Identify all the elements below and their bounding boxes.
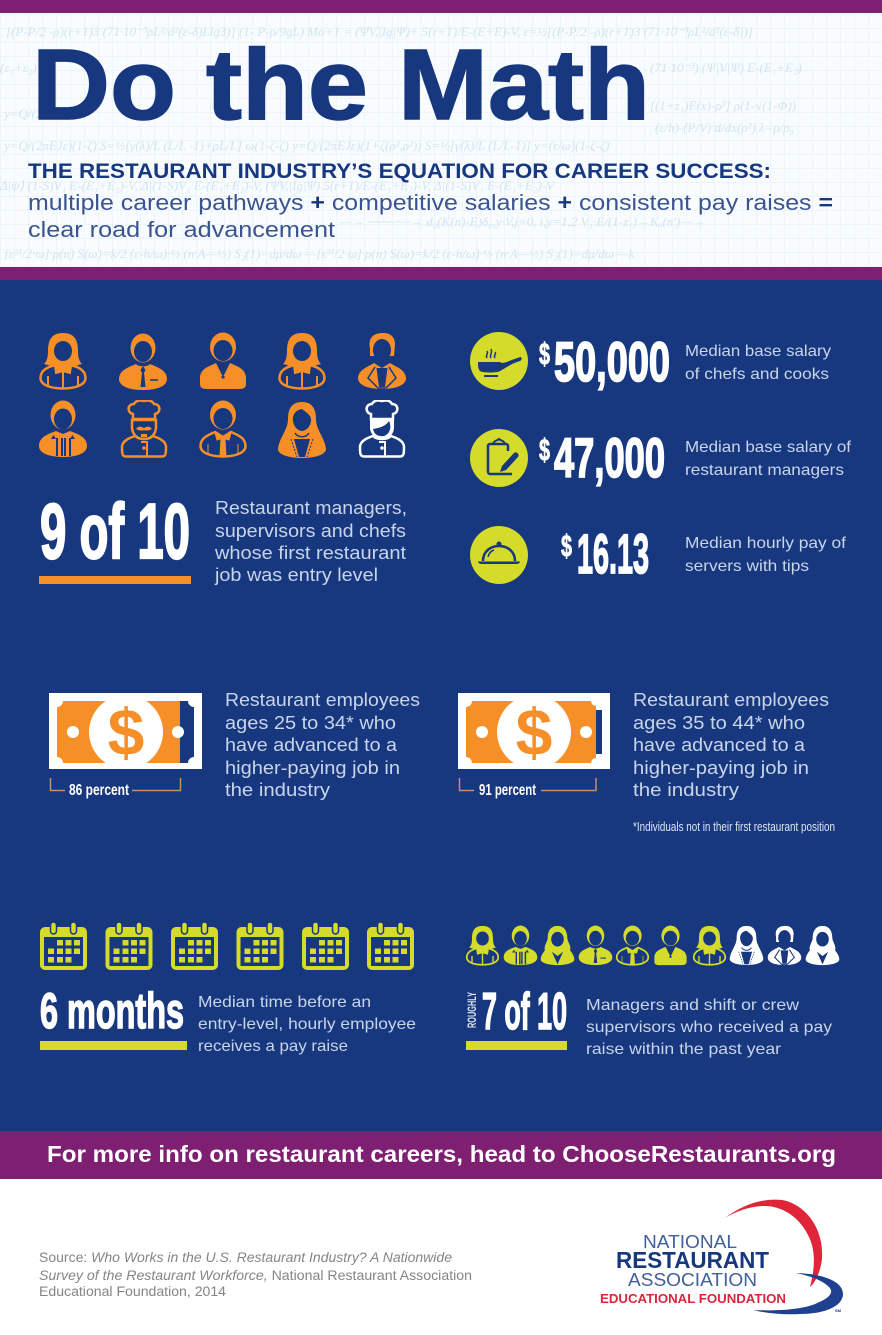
logo: National Restaurant Association Educational Foundation: ASSOCIATION: [628, 1270, 757, 1290]
statistic: $47,000: [539, 426, 665, 489]
text: 9 of 10 description: Restaurant managers,: [215, 498, 407, 518]
text: 7 of 10 description: supervisors who received a pay: [586, 1019, 832, 1036]
logo: National Restaurant Association Educational Foundation: RESTAURANT: [616, 1247, 769, 1273]
statistic: $16.13: 16.13: [577, 522, 649, 585]
text: 6 months description: receives a pay raise: [198, 1038, 348, 1055]
source text: [39, 1250, 472, 1299]
source text: Survey of the Restaurant Workforce, National Restaurant Association: [39, 1268, 472, 1283]
header background: y=Q/(2πEJε)(1-ζ) S=½[γ(λ)/L (L/L -1)+ρL/L] ω(1-ζ-ζ) y=Q/(2πEJε)(1+ζ(ρ²,ρ²)) S=½[γ(λ)/L (L/L-1)] y=(ε/ω)(1-ζ-ζ): [2, 138, 609, 153]
statistic: $50,000: $: [539, 336, 550, 371]
icon: frying pan: [470, 332, 528, 390]
call to action band: For more info on restaurant careers, head to ChooseRestaurants.org: [47, 1141, 836, 1167]
text: restaurant managers: Median base salary of: [685, 439, 852, 456]
text: 9 of 10 description: [214, 498, 407, 585]
bracket label: 91 percent: [460, 778, 596, 799]
text: ages 25 to 34: [225, 690, 420, 800]
text: ages 25 to 34: ages 25 to 34* who: [225, 713, 396, 733]
text: 9 of 10 description: job was entry level: [214, 565, 378, 585]
statistic: $16.13: $: [561, 528, 572, 563]
text: ages 35 to 44: higher-paying job in: [633, 758, 809, 778]
text: 7 of 10 description: raise within the past year: [586, 1041, 782, 1058]
header background: —→ ~~~~~~→ d₀(K(n)-E)δ₀,y·V,j=0, i,y=1,2 V₁·E/(1-z₁)→Kₐ(n')—→: [339, 214, 705, 229]
text: restaurant managers: restaurant managers: [685, 462, 844, 479]
icon: dollar bill 91 percent: [458, 693, 610, 769]
statistic: 9 of 10: 9 of 10: [40, 487, 190, 575]
text: 9 of 10 description: whose first restaurant: [214, 543, 406, 563]
icon: dollar bill 86 percent: $: [108, 695, 144, 769]
statistic: $47,000: 47,000: [554, 426, 665, 489]
text: ages 35 to 44: have advanced to a: [633, 735, 806, 755]
text: ages 35 to 44: the industry: [633, 780, 739, 800]
source text: Educational Foundation, 2014: [39, 1284, 227, 1299]
statistic: $50,000: [539, 330, 670, 393]
text: ages 35 to 44: Restaurant employees: [633, 690, 829, 710]
icons: ten restaurant workers: [39, 332, 406, 458]
bracket label: 91 percent: 91 percent: [479, 782, 536, 799]
icon: dollar bill 91 percent: $: [516, 695, 552, 769]
header background: (ε/h)-(P/V) d/dx(ρ²) λ=ρ/ρ₀: [655, 120, 794, 135]
text: chefs and cooks: [685, 343, 831, 383]
equation text: [28, 190, 833, 242]
purple divider: [0, 267, 882, 280]
text: 9 of 10 description: supervisors and chefs: [215, 521, 406, 541]
header background: [ε³¹/2·ω]·ρ(n) S(ω)=k/2 (ε-h/ω)·½ (n·A—½) S₂(1)=dμ/dω —[ε³¹/2·ω]·ρ(n) S(ω)=k/2 (ε-h/ω)·½ (n·A—½) S₂(1)=dμ/dω —k: [4, 246, 635, 261]
statistic: roughly 7 of 10: [466, 983, 567, 1050]
equation text: clear road for advancement: [28, 217, 336, 242]
text: restaurant managers: [685, 439, 852, 479]
text: ages 35 to 44: [633, 690, 829, 800]
text: 7 of 10 description: [586, 997, 832, 1058]
header background: (ε₁+ε₂) ∫ρ: [0, 60, 50, 76]
subtitle heading: THE RESTAURANT INDUSTRY’S EQUATION FOR CAREER SUCCESS:: [28, 160, 771, 183]
logo: National Restaurant Association Educational Foundation: EDUCATIONAL FOUNDATION: [600, 1291, 786, 1306]
icon: clipboard: [470, 429, 528, 487]
source text: Source: Who Works in the U.S. Restaurant Industry? A Nationwide: [39, 1250, 452, 1265]
statistic: $50,000: 50,000: [554, 330, 670, 393]
icons: ten supervisors: [467, 926, 839, 965]
header background: [(1+z₁)E(x)-ρ²] ρ(1-√(1-Φ)): [650, 98, 796, 113]
header background: Δ|ψ⟩ (1-S)V₁ E-(E₁+E₂)-V, Δ|(1-S)V₁ E-(E₁+E₂)-V, (ΨV,|Ig|Ψ) 5(r+1)/E-(E₁+E₂)-V, Δ|(1-S)V₁ E-(E₁+E₂)-V: [0, 178, 556, 193]
header background: [0, 0, 882, 268]
header background: y=Q/(2πEJε): [2, 106, 72, 121]
logo: National Restaurant Association Educational Foundation: [600, 1200, 843, 1314]
bracket label: 86 percent: 86 percent: [69, 782, 129, 799]
text: ages 35 to 44: ages 35 to 44* who: [633, 713, 805, 733]
header background: [(P-P/2 -ρ)(r+1)3 (71·10⁻³ρL²/d²(ε-δ)Llg3)] (1- P-ρ/9gL) Mo+1 = (ΨV,|Ig|Ψ)+ 5(r+1)/E-(E+E)-V, ε=½[(P-P/2 -ρ)(r+1)3 (71·10⁻³ρL²/d²(ε-δ))]: [6, 24, 753, 39]
text: 6 months description: [198, 994, 416, 1055]
logo: National Restaurant Association Educational Foundation: SM: [835, 1308, 842, 1313]
navy main panel: [0, 267, 882, 1132]
statistic: roughly 7 of 10: ROUGHLY: [467, 992, 479, 1028]
header background: (71·10⁻³) (Ψ|V|Ψ) E-(E₁+E₂): [650, 60, 802, 75]
top purple bar: [0, 0, 882, 13]
text: chefs and cooks: of chefs and cooks: [685, 366, 829, 383]
text: 7 of 10 description: Managers and shift or crew: [586, 997, 799, 1014]
icons: six calendars: [40, 922, 414, 970]
bracket label: 86 percent: [50, 778, 180, 799]
text: 6 months description: Median time before an: [198, 994, 371, 1011]
statistic: $47,000: $: [539, 432, 550, 467]
statistic: 6 months: [40, 983, 187, 1050]
title: Do the Math: [32, 29, 650, 141]
text: servers with tips: [685, 535, 847, 575]
icon: dollar bill 86 percent: [49, 693, 202, 769]
statistic: $16.13: [561, 522, 649, 585]
statistic: roughly 7 of 10: 7 of 10: [482, 983, 567, 1041]
text: ages 25 to 34: have advanced to a: [225, 735, 398, 755]
text: ages 25 to 34: Restaurant employees: [225, 690, 420, 710]
call to action band: [0, 1131, 882, 1179]
icon: cloche: [470, 526, 528, 584]
text: servers with tips: Median hourly pay of: [685, 535, 847, 552]
statistic: 9 of 10: [39, 487, 191, 584]
text: 6 months description: entry-level, hourly employee: [198, 1016, 416, 1033]
text: ages 25 to 34: the industry: [225, 780, 330, 800]
statistic: 6 months: 6 months: [40, 983, 184, 1039]
equation text: multiple career pathways + competitive salaries + consistent pay raises =: [28, 190, 833, 215]
text: servers with tips: servers with tips: [685, 558, 809, 575]
text: chefs and cooks: Median base salary: [685, 343, 831, 360]
text: ages 25 to 34: higher-paying job in: [225, 758, 400, 778]
logo: National Restaurant Association Educational Foundation: NATIONAL: [643, 1232, 737, 1252]
